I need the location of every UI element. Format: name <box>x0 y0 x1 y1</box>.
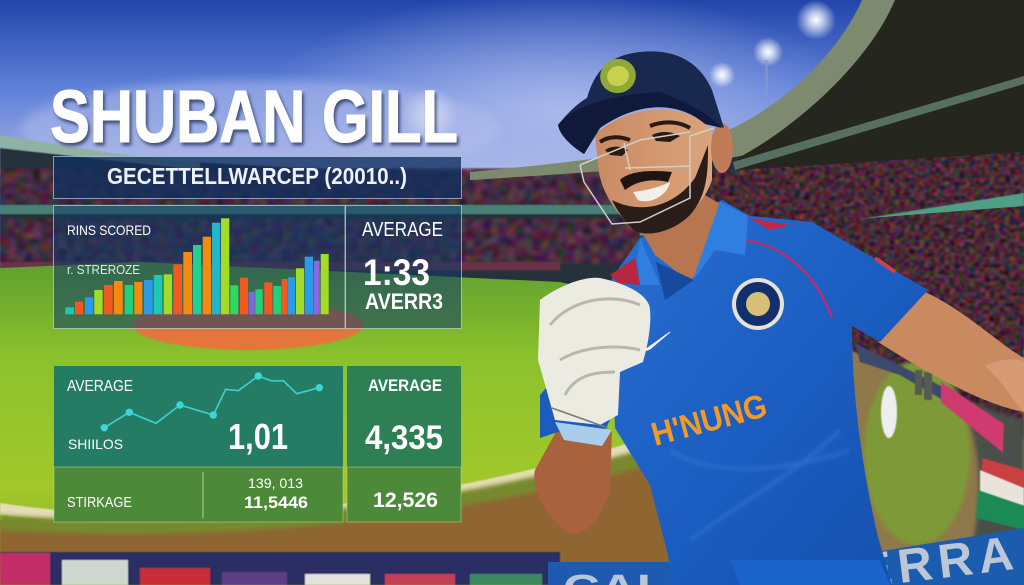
panel: subtitle bar: GECETTELLWARCEP (20010..) <box>107 163 407 189</box>
roof <box>735 0 1024 178</box>
glove <box>538 278 650 446</box>
panel: average <box>346 206 462 328</box>
swoosh <box>642 332 670 352</box>
eyes <box>605 132 680 156</box>
stands left <box>0 100 1024 350</box>
hand <box>985 359 1024 412</box>
value: 139,013: 139, 013 <box>248 475 303 491</box>
brows <box>600 122 690 142</box>
label: averr3: AVERR3 <box>365 289 443 314</box>
ear <box>711 123 733 173</box>
left forearm <box>534 430 612 534</box>
advertising strip left <box>0 552 560 585</box>
value: 12,526: 12,526 <box>373 489 438 512</box>
jersey emblem <box>732 278 784 330</box>
glasses <box>580 128 714 224</box>
panel: subtitle bar <box>54 156 462 198</box>
panel: strike row <box>54 467 343 522</box>
label: runs scored: RINS SCORED <box>67 222 151 238</box>
player figure <box>534 51 1024 585</box>
neck <box>642 195 722 282</box>
cap badge <box>595 54 641 98</box>
sponsor text: H'NUNG <box>647 386 771 453</box>
pitch circle <box>133 300 363 350</box>
label: average: AVERAGE <box>368 376 442 395</box>
right field <box>850 350 1024 560</box>
value: 1:33: 1:33 <box>363 252 430 293</box>
outfield <box>0 455 700 570</box>
label: average: AVERAGE <box>362 219 443 241</box>
right arm <box>878 292 1024 412</box>
face <box>595 109 712 233</box>
label: strikage: STIRKAGE <box>67 495 132 511</box>
value: 4,335: 4,335 <box>365 419 443 457</box>
floodlights <box>796 0 836 40</box>
smile <box>633 182 670 201</box>
grass <box>0 262 900 585</box>
line chart <box>101 372 323 431</box>
bar chart <box>65 218 329 314</box>
banner: CAL <box>548 562 678 585</box>
panel: average line chart <box>54 366 343 467</box>
panel: right stats <box>347 366 461 522</box>
right crowd <box>640 152 1024 228</box>
label: strike: r. STREROZE <box>67 262 140 277</box>
roof band <box>470 0 895 180</box>
value: 11,5446: 11,5446 <box>244 493 308 512</box>
cap <box>558 51 724 154</box>
beard <box>612 145 708 234</box>
panel: runs scored chart <box>54 206 345 328</box>
collar <box>637 202 748 285</box>
jersey <box>610 200 928 585</box>
value: 1,01: 1,01 <box>228 416 288 457</box>
title: SHUBAN GILL <box>50 75 458 158</box>
label: shields: SHIILOS <box>68 436 123 452</box>
label: average: AVERAGE <box>67 378 133 395</box>
